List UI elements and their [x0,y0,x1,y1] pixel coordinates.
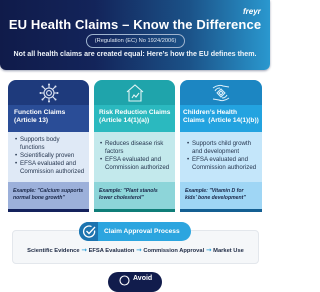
example: normal bone growth" [13,195,65,201]
bullet list: • [100,156,102,163]
bullet list [15,136,84,175]
icon: check circle [82,225,96,238]
bullet list: Supports child growth [192,140,251,147]
process steps: Scientific Evidence EFSA Evaluation Commission Approval Market Use [27,248,244,254]
bullet list: • [15,136,17,143]
avoid label: Avoid [133,275,152,282]
bullet list: • [15,160,17,167]
icon: molecule [40,84,58,102]
bullet list: factors [105,148,123,155]
example: Example: "Vitamin D for [185,188,244,194]
card heading: (Article 13) [14,117,48,124]
panel: claim approval process [12,230,259,264]
bullet list [187,140,256,171]
icon: avoid circle [120,276,130,286]
bullet list: EFSA evaluated and [192,156,248,163]
card heading: Children’s Health [183,109,237,116]
pill label: Claim Approval Process [104,228,180,235]
process steps: → [136,246,142,254]
card heading: Claims (Article 14(1)(b)) [183,117,259,124]
title: EU Health Claims – Know the Difference [9,17,261,32]
bullet list: • [187,156,189,163]
bullet list: Scientifically proven [20,152,74,159]
bullet list: Commission authorized [192,164,256,171]
process steps: → [206,246,211,254]
process steps: → [81,246,87,254]
example [94,182,175,209]
card heading: Function Claims [14,109,65,116]
bullet list: Commission authorized [105,164,169,171]
regulation pill: (Regulation (EC) No 1924/2006) [95,38,176,44]
icon: hands with diamond [212,84,230,102]
bullet list: • [100,140,102,147]
bullet list: • [187,140,189,147]
bullet list [100,140,169,171]
bullet list: EFSA evaluated and [105,156,161,163]
header banner [0,0,270,70]
bullet list: Supports body [20,136,60,143]
icon: house chart [126,84,144,102]
panel: risk reduction claims [94,80,175,212]
card heading [180,105,262,132]
example: kids’ bone development" [185,195,246,201]
bullet list: functions [20,144,45,151]
card heading [94,105,175,132]
example: lower cholesterol" [99,195,144,201]
card heading: Risk Reduction Claims [99,109,170,116]
panel: function claims [8,80,89,212]
bullet list: and development [192,148,239,155]
panel: children's health claims [180,80,262,212]
bullet list: • [15,152,17,159]
process heading pill [79,222,191,241]
subtitle: Not all health claims are created equal: Here’s how the EU defines them. [14,50,256,58]
bullet list: Commission authorized [20,168,84,175]
avoid pill [108,272,162,292]
card heading [8,105,89,132]
example: Example: "Calcium supports [13,188,83,194]
bullet list: EFSA evaluated and [20,160,76,167]
logo: freyr [243,7,261,16]
example: Example: "Plant stanols [99,188,158,194]
example [180,182,262,209]
regulation pill [86,34,185,48]
bullet list: Reduces disease risk [105,140,163,147]
example [8,182,89,209]
card heading: (Article 14(1)(a)) [99,117,149,124]
